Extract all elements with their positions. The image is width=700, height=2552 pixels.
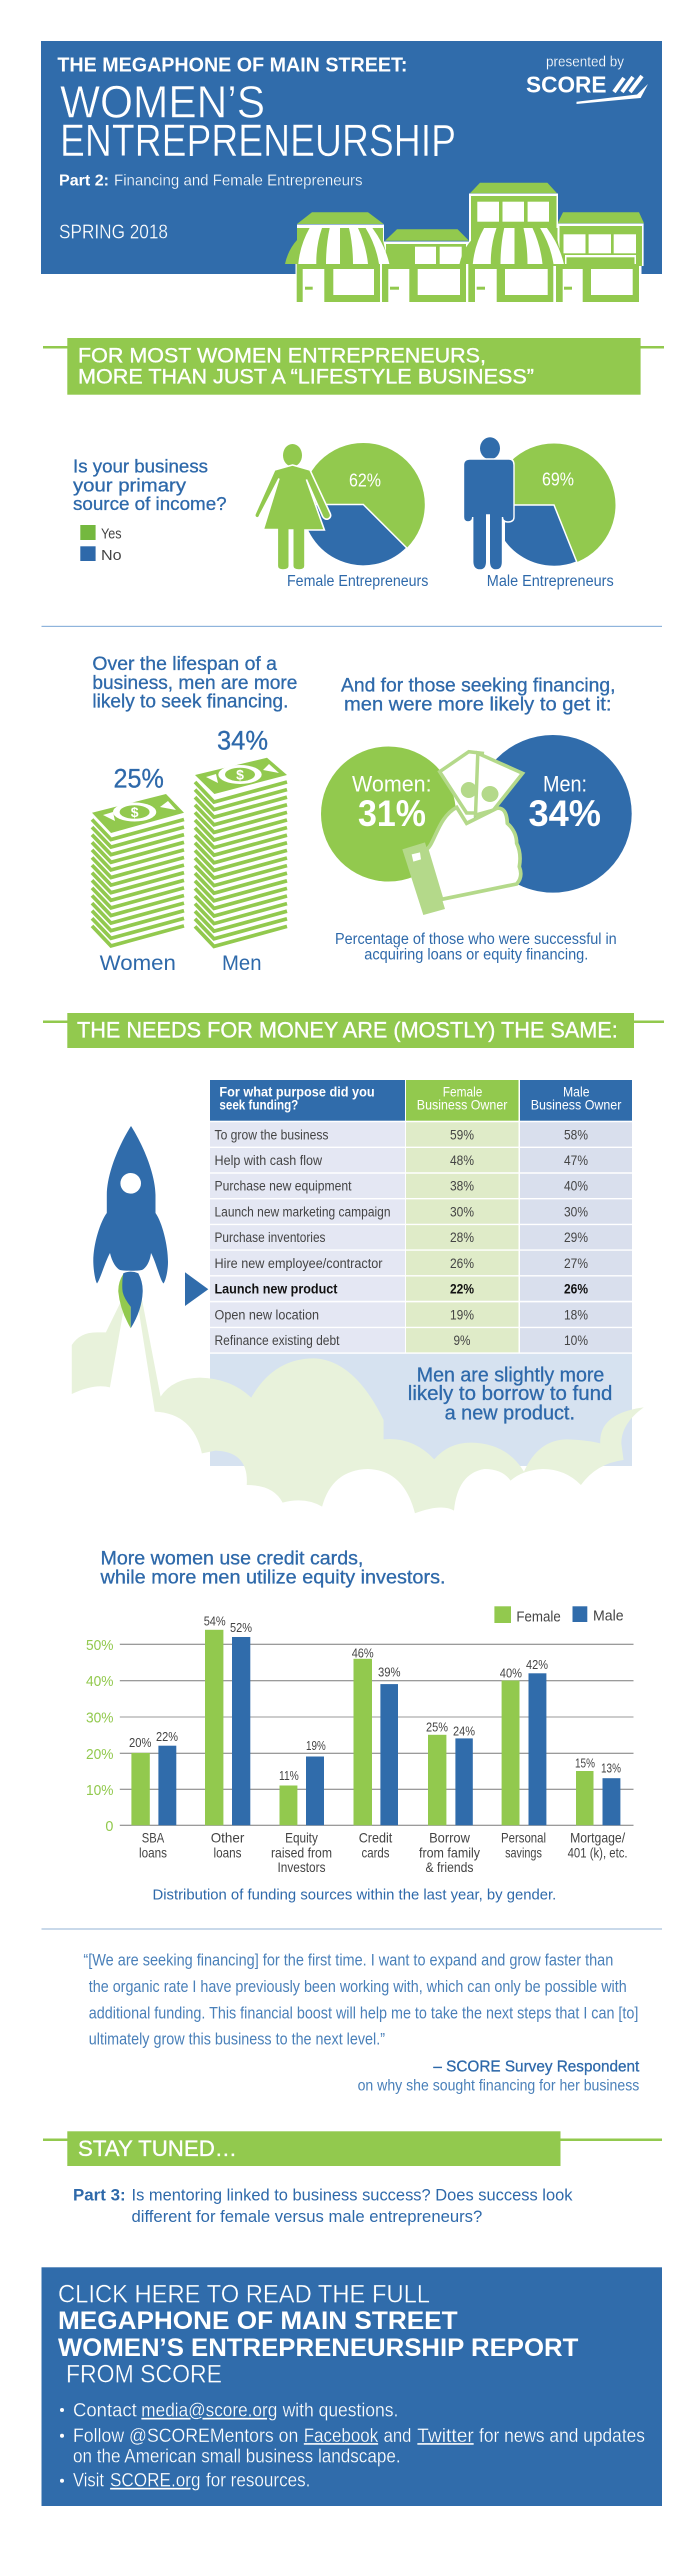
x axis labels: Mortgage/ xyxy=(570,1829,625,1845)
bullet: follow: Twitter xyxy=(417,2426,474,2447)
bar value labels: 22% xyxy=(156,1729,178,1744)
question text: Is your business xyxy=(73,457,208,477)
bar value labels: 52% xyxy=(230,1620,252,1635)
row: open new location: Open new location xyxy=(214,1307,319,1322)
subtitle: Financing and Female Entrepreneurs xyxy=(114,172,362,189)
bullet: follow xyxy=(60,2426,645,2467)
callout box: men borrow for new product xyxy=(210,1354,632,1466)
legend: yes / no: No xyxy=(101,547,122,564)
x axis labels: Investors xyxy=(278,1859,326,1875)
y axis labels: 40% xyxy=(86,1673,114,1690)
legend: female / male: Female xyxy=(516,1609,561,1626)
right awning xyxy=(460,228,564,264)
heading: credit cards and equity xyxy=(99,1548,445,1588)
bullet: contact: media@score.org xyxy=(141,2401,277,2422)
table row backgrounds xyxy=(210,1122,632,1352)
bar chart: funding sources by gender xyxy=(86,1606,634,1875)
bar value labels: 40% xyxy=(500,1665,522,1680)
heading: credit cards and equity: More women use credit cards, xyxy=(100,1548,363,1569)
y axis labels: 50% xyxy=(86,1637,114,1654)
question text xyxy=(73,457,227,514)
heading: credit cards and equity: while more men utilize equity investors. xyxy=(99,1567,445,1588)
x axis labels: loans xyxy=(214,1844,242,1860)
section banner: lifestyle business: MORE THAN JUST A “LIFESTYLE BUSINESS” xyxy=(78,365,534,388)
storefront roofs xyxy=(297,183,644,241)
heading: men more likely to seek financing xyxy=(92,654,297,712)
bullet: follow: Facebook xyxy=(304,2426,379,2447)
icon: hand holding money xyxy=(402,752,523,915)
row: purchase inventories: 29% xyxy=(564,1230,588,1245)
call to action heading: WOMEN’S ENTREPRENEURSHIP REPORT xyxy=(58,2334,578,2362)
table header: For what purpose did you xyxy=(219,1084,375,1100)
y axis labels: 0 xyxy=(105,1818,113,1835)
row: open new location: 19% xyxy=(450,1307,474,1322)
row: to grow the business: To grow the business xyxy=(214,1127,329,1142)
quote: “[We are seeking financing] for the first time. I want to expand and grow faster than xyxy=(83,1951,613,1970)
bar value labels: 46% xyxy=(352,1646,374,1661)
table header xyxy=(210,1080,632,1121)
bullet: visit: SCORE.org xyxy=(110,2471,200,2492)
money stack: men 34% xyxy=(195,725,287,975)
row: refinance existing debt: 10% xyxy=(564,1333,588,1348)
bar value labels: 25% xyxy=(426,1719,448,1734)
caption: male entrepreneurs: Male Entrepreneurs xyxy=(487,573,614,590)
bar value labels: 39% xyxy=(378,1665,401,1680)
row: launch new marketing campaign: Launch new marketing campaign xyxy=(214,1204,390,1219)
bars: female xyxy=(131,1630,594,1825)
call to action heading: FROM SCORE xyxy=(66,2361,222,2389)
quote attribution xyxy=(358,2059,640,2095)
row: launch new marketing campaign: 30% xyxy=(450,1204,474,1219)
section banner: lifestyle business xyxy=(43,338,664,395)
left awning xyxy=(285,228,389,264)
section banner: stay tuned xyxy=(43,2131,662,2166)
row: purchase inventories: Purchase inventories xyxy=(214,1230,326,1245)
y axis labels xyxy=(86,1637,114,1835)
question text: source of income? xyxy=(73,494,227,514)
logo: SCORE xyxy=(526,72,648,104)
title: ENTREPRENEURSHIP xyxy=(60,115,456,166)
bullet: follow: on the American small business landscape. xyxy=(73,2446,401,2467)
pie chart: female entrepreneurs xyxy=(302,443,425,566)
x axis labels: loans xyxy=(139,1844,167,1860)
illustration: smoke cloud xyxy=(72,1298,644,1513)
legend: yes / no xyxy=(80,525,122,564)
row: refinance existing debt xyxy=(214,1333,588,1348)
row: help with cash flow: Help with cash flow xyxy=(214,1153,322,1168)
x axis labels: Equity xyxy=(285,1829,318,1845)
icon: woman xyxy=(255,444,331,570)
bullet: follow: Follow @SCOREMentors on xyxy=(73,2426,298,2447)
heading: men more likely to get it: men were more likely to get it: xyxy=(344,695,612,716)
table: purposes for funding xyxy=(210,1080,632,1352)
bullet: contact: with questions. xyxy=(282,2401,398,2422)
money stack: men 34%: 34% xyxy=(217,725,268,755)
x axis labels: SBA xyxy=(142,1829,165,1845)
bullet: visit xyxy=(60,2471,310,2492)
title xyxy=(60,76,456,166)
x axis labels: Credit xyxy=(359,1829,392,1845)
section banner: lifestyle business: FOR MOST WOMEN ENTREPRENEURS, xyxy=(78,345,486,368)
presented by label: presented by xyxy=(546,54,624,71)
x axis labels xyxy=(139,1829,628,1875)
row: hire new employee/contractor: 26% xyxy=(450,1256,474,1271)
table header: Business Owner xyxy=(417,1096,508,1112)
row: to grow the business xyxy=(214,1127,588,1142)
bars: male xyxy=(158,1637,620,1825)
row: refinance existing debt: Refinance existing debt xyxy=(214,1333,340,1348)
circle: women 31%: 31% xyxy=(358,793,426,834)
arrow: pointing to highlighted row xyxy=(185,1272,208,1306)
section banner: needs for money: THE NEEDS FOR MONEY ARE (MOSTLY) THE SAME: xyxy=(77,1018,618,1043)
call to action heading: MEGAPHONE OF MAIN STREET xyxy=(58,2307,458,2335)
y axis labels: 20% xyxy=(86,1746,114,1763)
part 3 teaser: different for female versus male entrepreneurs? xyxy=(132,2207,482,2226)
table header: seek funding? xyxy=(219,1096,298,1112)
row: refinance existing debt: 9% xyxy=(454,1333,470,1348)
quote xyxy=(83,1951,638,2049)
row: launch new product (highlighted): 22% xyxy=(450,1282,474,1296)
bar value labels xyxy=(129,1613,621,1783)
bar value labels: 13% xyxy=(601,1760,621,1775)
circle: men 34% xyxy=(474,735,632,893)
row: launch new marketing campaign xyxy=(214,1204,588,1219)
row: launch new product (highlighted): 26% xyxy=(564,1282,588,1296)
call to action heading: CLICK HERE TO READ THE FULL xyxy=(58,2280,430,2308)
row: launch new product (highlighted) xyxy=(214,1282,588,1296)
row: purchase inventories: 28% xyxy=(450,1230,474,1245)
bar value labels: 11% xyxy=(279,1768,299,1783)
bullet: follow: for news and updates xyxy=(479,2426,645,2447)
circle: women 31%: Women: xyxy=(352,772,432,797)
row: launch new product (highlighted): Launch new product xyxy=(214,1282,338,1296)
call to action heading xyxy=(58,2280,578,2389)
icon: rocket xyxy=(93,1126,168,1328)
icon: man xyxy=(464,437,514,570)
x axis labels: raised from xyxy=(271,1844,332,1860)
money stack: men 34%: $ xyxy=(236,766,244,782)
quote: ultimately grow this business to the next level.” xyxy=(89,2030,385,2049)
x axis labels: Personal xyxy=(501,1829,546,1845)
row: purchase new equipment: Purchase new equipment xyxy=(214,1179,352,1194)
bullet: visit: for resources. xyxy=(206,2471,310,2492)
circle: women 31% xyxy=(321,746,456,882)
bar value labels: 19% xyxy=(306,1738,326,1753)
row: to grow the business: 59% xyxy=(450,1127,474,1142)
money stack: men 34%: Men xyxy=(222,952,262,975)
money stack: women 25%: Women xyxy=(100,952,176,975)
bar value labels: 54% xyxy=(204,1613,226,1628)
heading: men more likely to seek financing: Over the lifespan of a xyxy=(92,654,277,675)
circle: men 34%: 34% xyxy=(528,793,601,834)
panel: call to action xyxy=(42,2267,662,2506)
date: SPRING 2018 xyxy=(59,222,168,244)
pie chart: male entrepreneurs xyxy=(480,444,616,572)
row: purchase new equipment: 38% xyxy=(450,1179,474,1194)
heading: men more likely to seek financing: business, men are more xyxy=(92,673,297,694)
caption: financing success: Percentage of those who were successful in xyxy=(335,931,617,948)
section banner: stay tuned: STAY TUNED… xyxy=(78,2136,237,2161)
question text: your primary xyxy=(73,476,186,496)
quote attribution: on why she sought financing for her business xyxy=(358,2078,640,2095)
legend: yes / no: Yes xyxy=(101,526,122,543)
bullet: contact: Contact xyxy=(73,2401,137,2422)
section banner: needs for money xyxy=(43,1013,664,1048)
row: purchase inventories xyxy=(214,1230,588,1245)
legend: female / male xyxy=(494,1606,624,1626)
x axis labels: savings xyxy=(505,1844,542,1860)
pie chart: female entrepreneurs: 62% xyxy=(349,471,381,491)
row: help with cash flow: 47% xyxy=(564,1153,588,1168)
part 3 teaser xyxy=(73,2186,573,2226)
heading: men more likely to get it xyxy=(341,676,616,716)
chart caption: Distribution of funding sources within the last year, by gender. xyxy=(152,1886,556,1904)
y axis labels: 10% xyxy=(86,1782,114,1799)
callout box: men borrow for new product: a new product. xyxy=(445,1402,575,1424)
title: WOMEN’S xyxy=(60,76,265,127)
bar value labels: 20% xyxy=(129,1735,152,1750)
money stack: women 25%: $ xyxy=(131,804,139,820)
x axis labels: Other xyxy=(211,1829,245,1845)
bar value labels: 42% xyxy=(526,1657,548,1672)
header eyebrow: THE MEGAPHONE OF MAIN STREET: xyxy=(57,55,407,77)
row: hire new employee/contractor: 27% xyxy=(564,1256,588,1271)
row: open new location xyxy=(214,1307,588,1322)
row: open new location: 18% xyxy=(564,1307,588,1322)
row: purchase new equipment xyxy=(214,1179,588,1194)
bullet: visit: Visit xyxy=(73,2471,105,2492)
panel: header xyxy=(41,41,662,304)
callout box: men borrow for new product: likely to borrow to fund xyxy=(408,1383,612,1405)
bar value labels: 24% xyxy=(453,1724,475,1739)
heading: men more likely to get it: And for those seeking financing, xyxy=(341,676,616,697)
storefront ground floors xyxy=(297,264,639,302)
row: launch new marketing campaign: 30% xyxy=(564,1204,588,1219)
table header: Male xyxy=(563,1084,590,1100)
circle: men 34%: Men: xyxy=(543,772,587,797)
x axis labels: 401 (k), etc. xyxy=(568,1844,628,1860)
x axis labels: from family xyxy=(419,1844,480,1860)
row: hire new employee/contractor: Hire new employee/contractor xyxy=(214,1256,383,1271)
row: help with cash flow: 48% xyxy=(450,1153,474,1168)
storefront upper walls xyxy=(297,194,644,266)
table header: Female xyxy=(443,1084,482,1100)
caption: financing success: acquiring loans or equity financing. xyxy=(364,946,588,963)
row: hire new employee/contractor xyxy=(214,1256,588,1271)
row: purchase new equipment: 40% xyxy=(564,1179,588,1194)
pie chart: male entrepreneurs: 69% xyxy=(542,470,574,490)
x axis labels: cards xyxy=(362,1844,390,1860)
caption: female entrepreneurs: Female Entrepreneurs xyxy=(287,573,429,590)
x axis labels: Borrow xyxy=(429,1829,471,1845)
money stack: women 25% xyxy=(92,764,184,975)
x axis labels: & friends xyxy=(426,1859,474,1875)
quote attribution: – SCORE Survey Respondent xyxy=(433,2059,640,2076)
money stack: women 25%: 25% xyxy=(114,764,164,794)
row: to grow the business: 58% xyxy=(564,1127,588,1142)
bullet: follow: and xyxy=(384,2426,411,2447)
part 3 teaser: Part 3: xyxy=(73,2186,126,2205)
heading: men more likely to seek financing: likely to seek financing. xyxy=(92,691,288,712)
header background xyxy=(41,41,662,274)
bar value labels: 15% xyxy=(575,1756,595,1771)
illustration: storefronts xyxy=(285,183,644,304)
row: help with cash flow xyxy=(214,1153,588,1168)
y axis labels: 30% xyxy=(86,1710,114,1726)
table header: Business Owner xyxy=(531,1096,622,1112)
part 3 teaser: Is mentoring linked to business success? Does success look xyxy=(132,2186,573,2205)
legend: female / male: Male xyxy=(593,1608,624,1625)
logo: SCORE: SCORE xyxy=(526,72,606,98)
bullet: contact xyxy=(60,2401,398,2422)
caption: financing success xyxy=(335,931,617,963)
callout box: men borrow for new product: Men are slightly more xyxy=(417,1365,604,1387)
subtitle: Part 2: xyxy=(59,172,109,189)
